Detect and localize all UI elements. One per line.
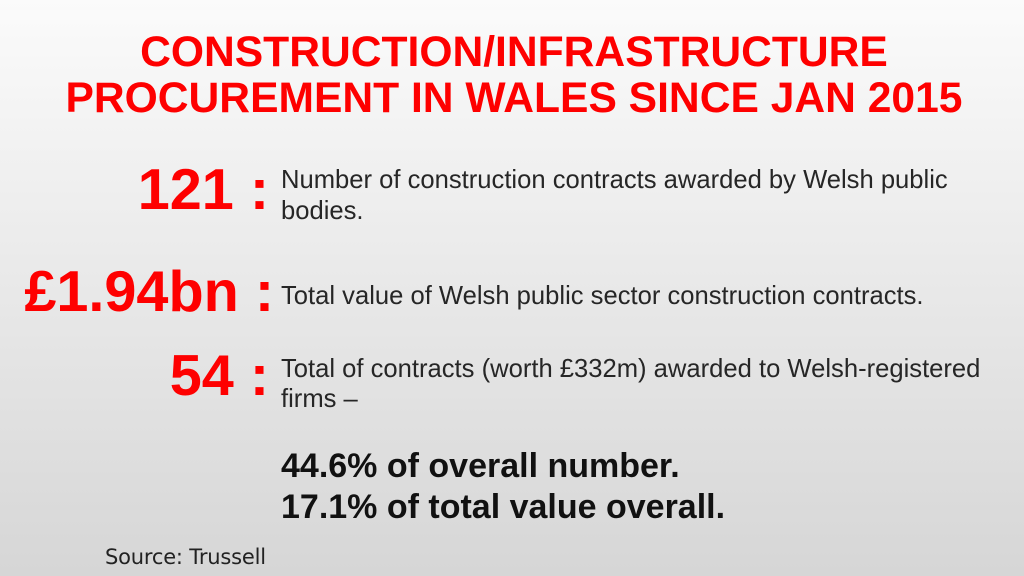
description: contracts awarded: Number of construction contracts awarded by Welsh public (281, 166, 948, 194)
description: Welsh-registered firms: Total of contracts (worth £332m) awarded to Welsh-registered (281, 354, 980, 382)
highlighted percentages: 17.1% of total value overall. (281, 488, 725, 526)
description: contracts awarded (281, 166, 948, 224)
title: PROCUREMENT IN WALES SINCE JAN 2015 (65, 74, 962, 122)
stat: 54: 54 : (170, 344, 269, 408)
description: contracts awarded: bodies. (281, 196, 364, 224)
source note: Source: Trussell (105, 545, 266, 569)
title (65, 28, 962, 122)
highlighted percentages: 44.6% of overall number. (281, 447, 680, 485)
description: Welsh-registered firms: firms – (281, 385, 358, 413)
title: CONSTRUCTION/INFRASTRUCTURE (140, 28, 888, 76)
description: Welsh-registered firms (281, 354, 980, 413)
stat: 121: 121 : (138, 158, 269, 222)
description: total value: Total value of Welsh public sector construction contracts. (281, 282, 924, 310)
highlighted percentages (281, 447, 725, 526)
stat: £1.94bn: £1.94bn : (24, 260, 274, 324)
